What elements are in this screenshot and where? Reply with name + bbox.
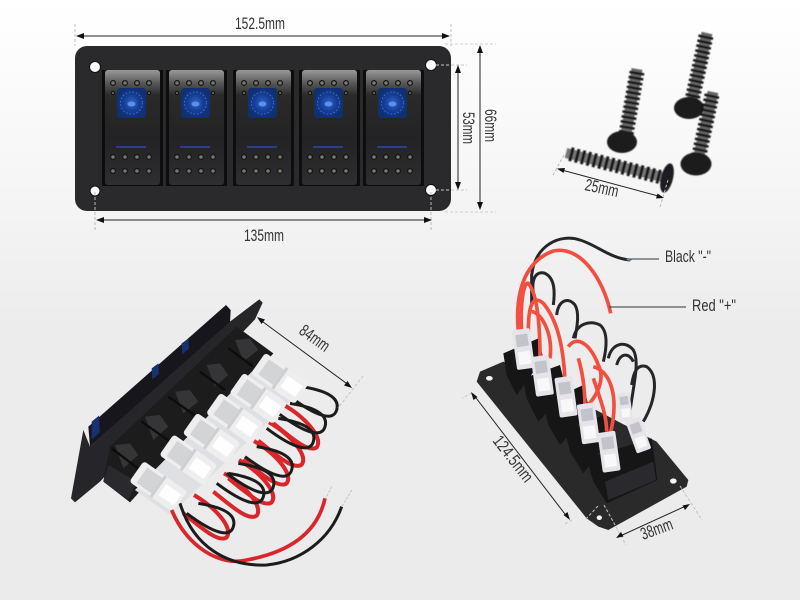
black lead wire	[180, 503, 342, 565]
front rocker recess	[605, 462, 656, 500]
dimension: 124.5mm length	[462, 392, 598, 524]
dimension: 152.5mm width: 152.5mm	[235, 14, 285, 33]
red lead wire	[172, 498, 325, 561]
label: black negative wire	[630, 247, 711, 266]
dimension: 135mm hole spacing	[95, 192, 432, 245]
fuse band	[135, 358, 305, 515]
panel: front view of switch panel	[75, 46, 451, 211]
dimension: 135mm hole spacing: 135mm	[244, 226, 284, 245]
fuse connectors	[512, 328, 651, 473]
rocker switch 1	[102, 70, 163, 186]
screw: upper left	[607, 69, 637, 153]
dimension: 124.5mm length: 124.5mm	[489, 432, 537, 486]
screw: back right	[674, 33, 707, 119]
label: red positive wire: Red "+"	[692, 296, 736, 315]
black lead tip	[627, 256, 631, 263]
label: black negative wire: Black "-"	[665, 247, 711, 266]
dimension: 38mm plate width: 38mm	[638, 515, 675, 544]
dimension: 53mm hole spacing	[436, 65, 478, 190]
switch bodies	[503, 338, 657, 503]
dimension: 38mm plate width	[604, 486, 702, 545]
dimension: 25mm screw length	[553, 155, 668, 207]
panel: side view with wiring	[71, 299, 352, 565]
screw: lying flat	[566, 153, 676, 194]
metal plate	[75, 46, 451, 211]
mounting holes	[486, 376, 677, 520]
screws group	[566, 33, 713, 194]
dimension: 66mm height: 66mm	[481, 109, 500, 142]
mounting holes	[90, 60, 436, 196]
stripped wire guides	[326, 487, 352, 506]
dimension: 84mm depth: 84mm	[296, 321, 334, 356]
dimension: 152.5mm width	[75, 14, 451, 46]
switch fronts behind plate	[88, 305, 231, 447]
panel: angled top view with wiring	[477, 238, 688, 530]
rocker switch 4	[299, 70, 360, 186]
fuse connectors	[129, 353, 309, 512]
dimension: 66mm height	[445, 44, 500, 212]
red wire loops	[518, 250, 614, 435]
label: red positive wire	[609, 296, 736, 315]
switch bodies	[103, 327, 273, 502]
mounting plate	[477, 362, 688, 530]
rocker switch 3	[233, 70, 294, 186]
red wire loops	[183, 405, 318, 539]
dimension: 84mm depth	[257, 317, 363, 408]
rocker switch 5	[363, 70, 424, 186]
rocker switch 2	[166, 70, 227, 186]
dimension: 25mm screw length: 25mm	[583, 175, 620, 201]
black wire loops	[187, 387, 337, 533]
dimension: 53mm hole spacing: 53mm	[459, 112, 478, 144]
screw: front right	[680, 92, 713, 176]
mounting plate edge	[71, 299, 263, 502]
black wire loops	[532, 238, 654, 422]
